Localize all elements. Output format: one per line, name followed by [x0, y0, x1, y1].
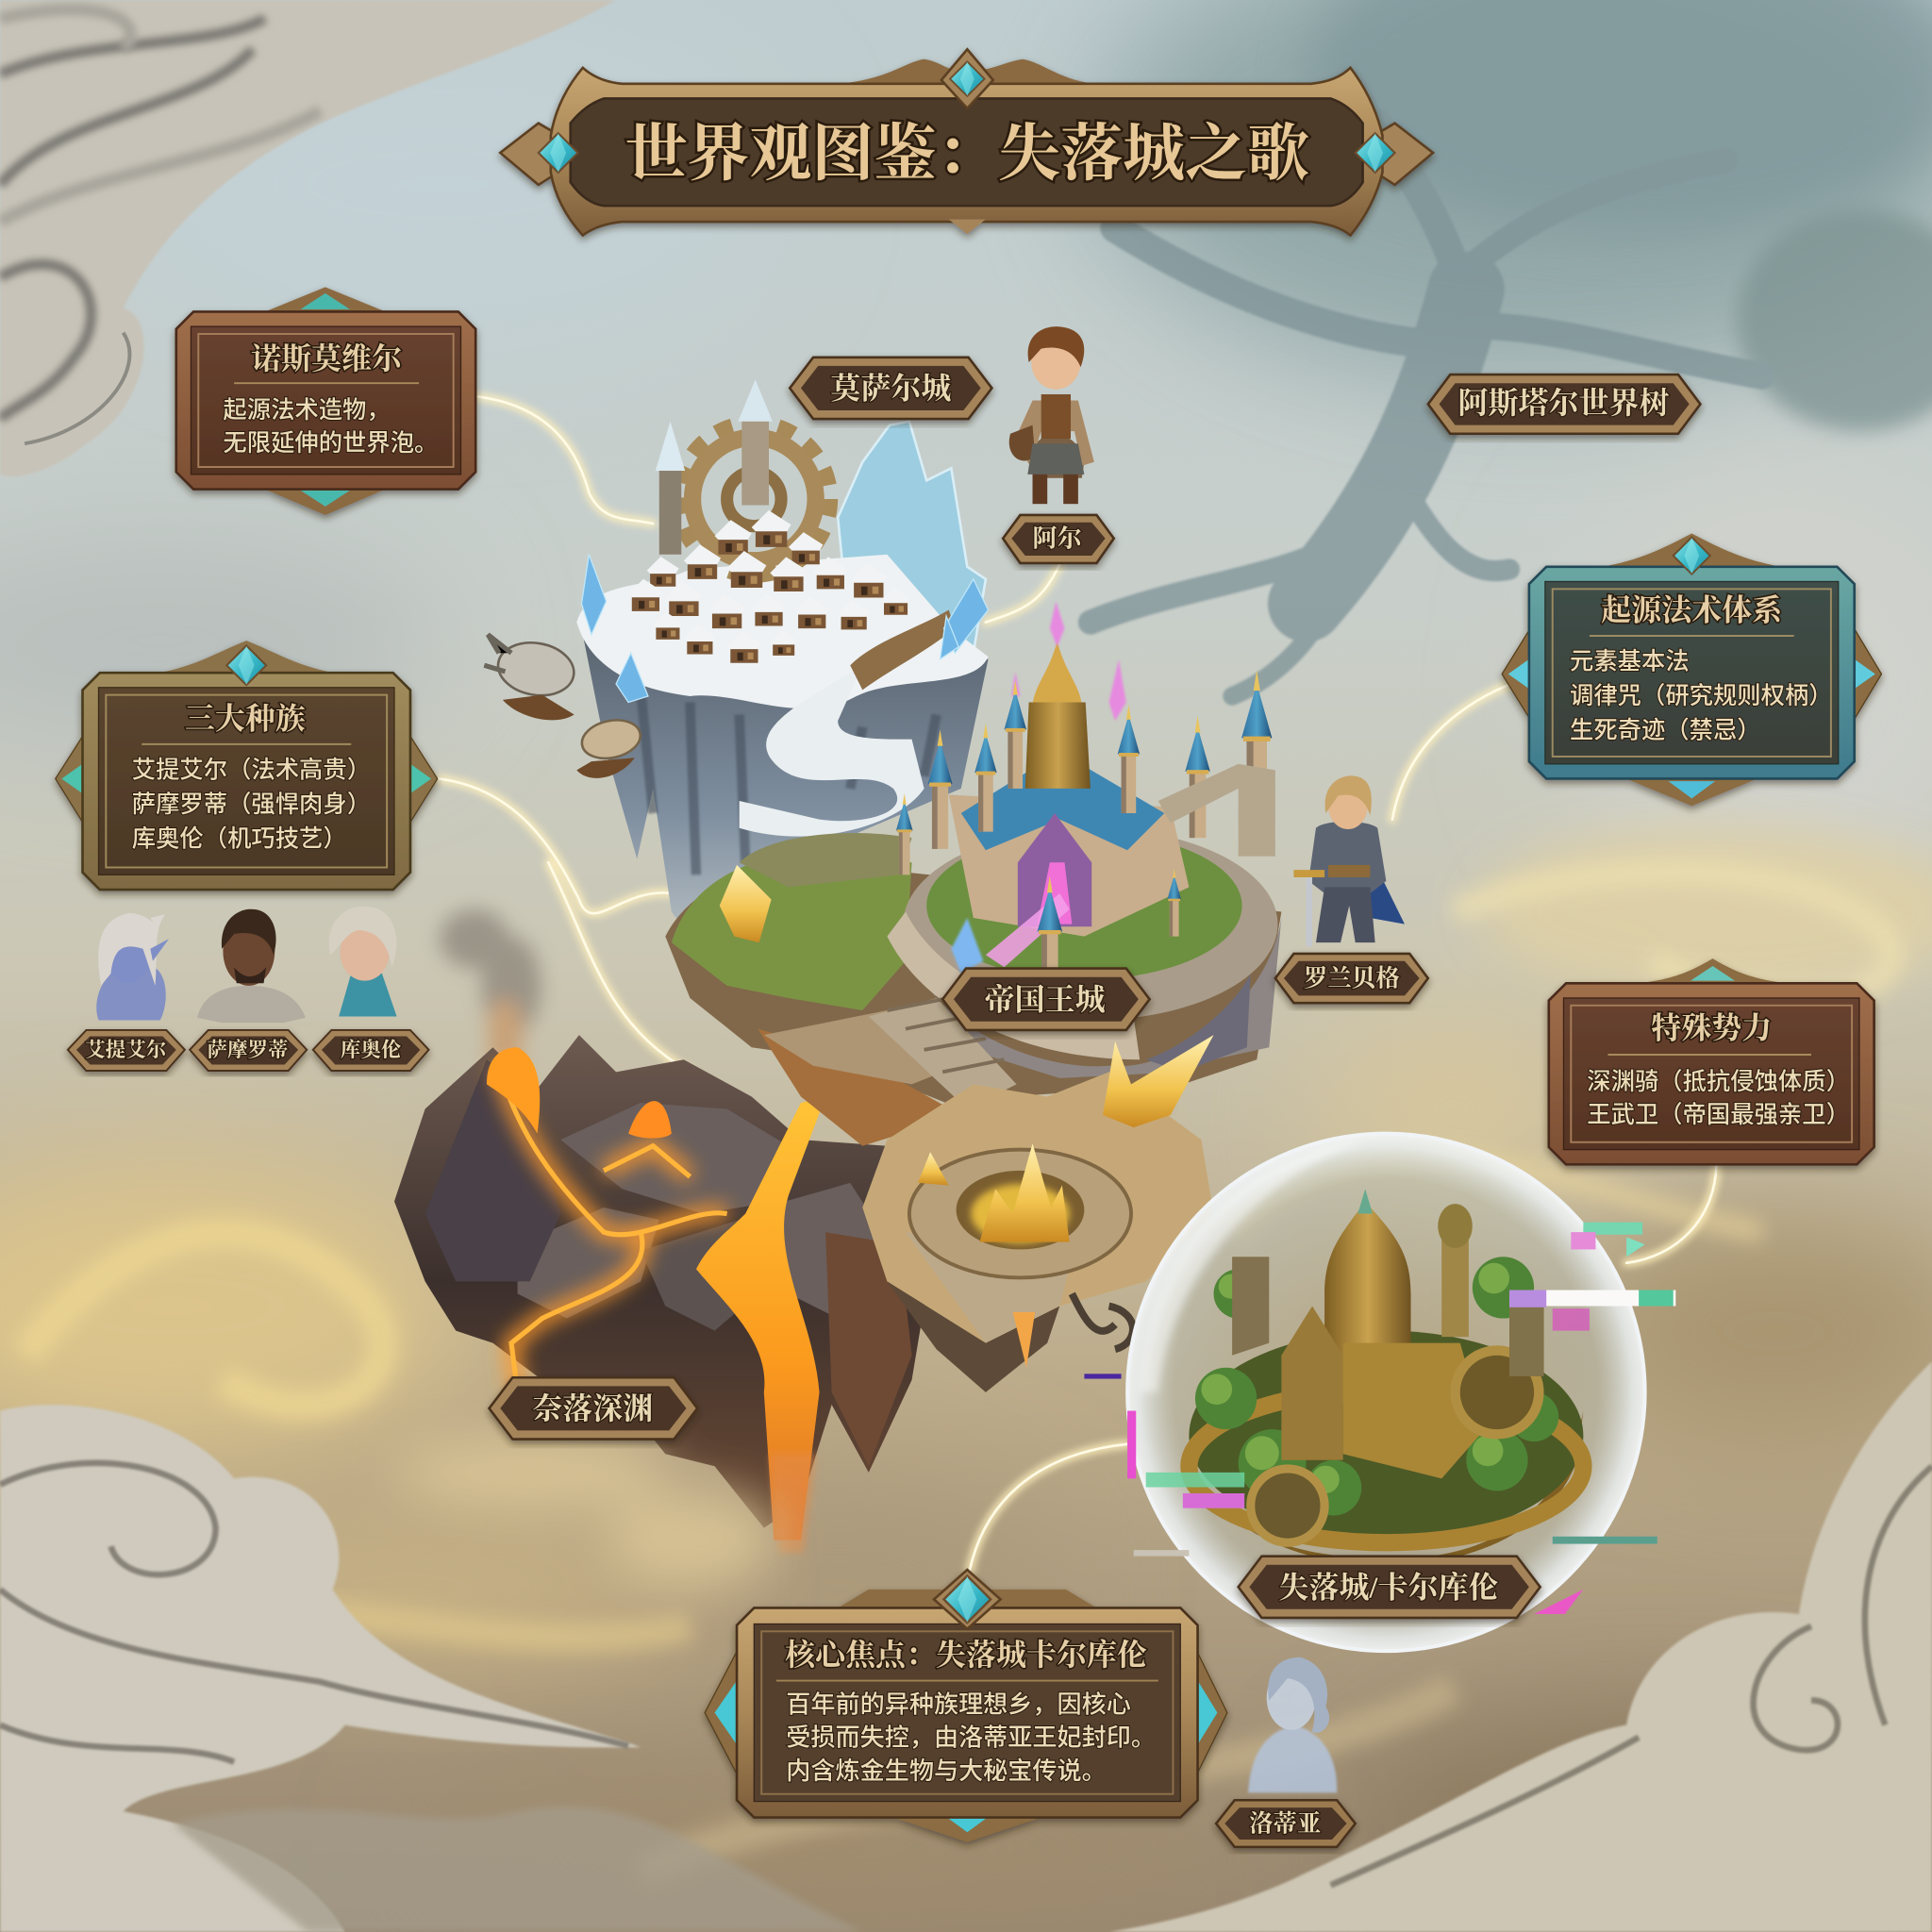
crater flame — [487, 1047, 540, 1134]
title banner — [500, 49, 1433, 235]
greatwall arches — [1146, 974, 1251, 1072]
divider — [234, 382, 419, 384]
volcano smoke — [440, 909, 541, 1072]
lava fall fade — [770, 1454, 816, 1553]
label: Samoroti — [190, 1030, 307, 1071]
castle core — [949, 794, 1189, 937]
right handle — [1345, 124, 1433, 185]
inner border — [198, 334, 454, 467]
central spire with golden dome — [1033, 641, 1082, 745]
divider — [1607, 1054, 1811, 1056]
body text: 起源法术造物， — [223, 397, 391, 424]
wood — [1545, 581, 1839, 764]
label: Aitiel: 艾提艾尔 — [85, 1039, 168, 1061]
character: Roland — [1293, 775, 1405, 946]
side wings — [1502, 612, 1881, 736]
ice peaks — [838, 422, 986, 653]
heading: 特殊势力 — [1651, 1010, 1772, 1044]
right gem — [1198, 1681, 1217, 1744]
label: Al — [1003, 515, 1114, 563]
frame — [1549, 983, 1874, 1164]
portrait: Kuolun engineer — [329, 907, 397, 1017]
frame — [1529, 567, 1855, 778]
divider — [776, 1680, 1158, 1682]
arch bridge — [1158, 764, 1275, 857]
lava veins — [499, 1066, 727, 1392]
right gem — [410, 764, 431, 793]
frame — [737, 1607, 1198, 1818]
inner border — [1571, 1006, 1852, 1142]
cliff — [581, 628, 989, 937]
top gem — [941, 49, 993, 108]
heading: 诺斯莫维尔 — [251, 341, 404, 375]
snow plateau — [576, 555, 989, 708]
panel: core focus — [705, 1570, 1227, 1842]
secondary vent — [628, 1101, 672, 1139]
body text: 元素基本法 — [1570, 648, 1690, 675]
body text: 百年前的异种族理想乡，因核心 — [786, 1690, 1131, 1718]
crest gem — [934, 1570, 1001, 1629]
ink cloud: bottom left — [0, 1405, 862, 1932]
volcano cone — [425, 1059, 560, 1281]
golden crystal cluster, upper right — [1103, 1035, 1214, 1127]
cliff shading — [641, 690, 937, 874]
title text: 世界观图鉴：失落城之歌 — [625, 120, 1309, 189]
label: Al: 阿尔 — [1033, 525, 1084, 552]
portrait: Aitiel elf — [96, 913, 169, 1020]
label: lost city — [1239, 1557, 1541, 1618]
hanging crystal — [1013, 1312, 1035, 1368]
ink cloud: bottom right — [1109, 1361, 1932, 1932]
bottom crest — [893, 1818, 1041, 1842]
crest gem — [1674, 537, 1710, 575]
low mist under lava island — [394, 1433, 776, 1590]
label: Mosar city — [790, 358, 991, 419]
airships — [484, 635, 644, 778]
wood — [98, 688, 394, 874]
label: Samoroti: 萨摩罗蒂 — [207, 1038, 289, 1061]
frame — [176, 311, 475, 490]
heading: 三大种族 — [185, 701, 306, 735]
wood — [1563, 998, 1859, 1150]
label: lost city: 失落城/卡尔库伦 — [1279, 1570, 1498, 1604]
body text: 生死奇迹（禁忌） — [1570, 718, 1761, 744]
panel: origin magic — [1502, 534, 1881, 806]
inner border — [761, 1631, 1173, 1794]
right gem — [1356, 133, 1395, 173]
crest gem — [226, 645, 266, 685]
stairs — [869, 998, 1017, 1109]
body text: 艾提艾尔（法术高贵） — [132, 757, 371, 783]
castle island: imperial capital — [665, 601, 1281, 1146]
label: Lotia: 洛蒂亚 — [1249, 1810, 1321, 1838]
top crest — [838, 1590, 1096, 1607]
underside — [758, 1029, 961, 1146]
golden crystal cluster, ring — [979, 1143, 1070, 1242]
label: imperial capital — [942, 969, 1150, 1030]
left gem — [1508, 659, 1529, 689]
top crest — [1602, 534, 1782, 567]
label: imperial capital: 帝国王城 — [985, 982, 1106, 1016]
label: Kuolun: 库奥伦 — [341, 1038, 401, 1061]
snow path — [740, 665, 924, 837]
body text: 王武卫（帝国最强亲卫） — [1587, 1102, 1850, 1128]
side wings — [705, 1633, 1227, 1792]
top crest — [160, 641, 333, 673]
label: Naraka abyss — [490, 1377, 697, 1440]
glitch artefacts — [1084, 1223, 1675, 1614]
ring plinth — [909, 1150, 1131, 1277]
bottom gem — [1668, 781, 1715, 798]
town houses — [628, 510, 910, 663]
top gem stone — [950, 61, 985, 96]
inner border — [106, 695, 387, 868]
left gem — [539, 133, 578, 173]
label: Roland — [1275, 954, 1428, 1003]
towers — [656, 379, 773, 555]
wood — [191, 326, 460, 475]
golden platform — [862, 1035, 1214, 1392]
blue crystal lamps — [951, 918, 983, 974]
snow island: Mosar city — [576, 379, 989, 937]
stone bridge ruins — [850, 610, 955, 690]
world tree silhouette — [1091, 0, 1932, 696]
bottom gem — [265, 490, 386, 515]
ink cloud: top left — [0, 0, 616, 476]
right gem — [1855, 659, 1875, 689]
lava glow — [499, 1066, 727, 1392]
front gear — [1251, 1469, 1324, 1542]
bottom point — [949, 219, 986, 234]
dome building — [1232, 1189, 1544, 1478]
greenery — [1195, 1257, 1558, 1516]
wood panel — [571, 98, 1363, 206]
bottom gem — [949, 1819, 986, 1832]
ice crystals — [581, 555, 989, 702]
rock mass — [394, 1035, 937, 1528]
label: Kuolun — [313, 1030, 429, 1071]
left handle — [500, 124, 589, 185]
panel: Nosmovir — [176, 287, 475, 515]
heading: 起源法术体系 — [1601, 593, 1783, 627]
body text: 萨摩罗蒂（强悍肉身） — [132, 791, 371, 818]
character: Al — [1009, 326, 1094, 504]
crest — [837, 59, 1095, 84]
blue spires — [896, 671, 1272, 998]
frame — [551, 68, 1382, 235]
label: Aitiel — [68, 1030, 185, 1071]
side wings — [56, 721, 438, 838]
label: Lotia — [1216, 1800, 1356, 1847]
rock base — [665, 862, 1281, 1109]
label: Roland: 罗兰贝格 — [1304, 965, 1400, 992]
pink spire flames — [1011, 601, 1126, 721]
clockwork gear — [677, 423, 830, 575]
panel: special factions — [1549, 958, 1874, 1164]
green meadow — [672, 850, 912, 1010]
left gem — [715, 1681, 737, 1744]
body text: 无限延伸的世界泡。 — [223, 430, 438, 457]
top gem — [265, 287, 386, 311]
panel: three races — [56, 641, 438, 890]
top crest — [1639, 958, 1787, 983]
label: Naraka abyss: 奈落深渊 — [532, 1391, 653, 1425]
glass highlight — [1140, 1140, 1368, 1392]
glitched bubble with lost city — [1084, 1134, 1675, 1651]
inner border — [1553, 589, 1831, 757]
city base ring — [1183, 1411, 1583, 1565]
body text: 受损而失控，由洛蒂亚王妃封印。 — [786, 1724, 1156, 1752]
heading: 核心焦点：失落城卡尔库伦 — [785, 1638, 1147, 1672]
golden shard — [720, 865, 772, 942]
divider — [142, 743, 351, 745]
hanging rock — [825, 1232, 912, 1466]
wood — [754, 1624, 1180, 1802]
portrait: Samoroti warrior — [197, 909, 306, 1023]
body text: 深渊骑（抵抗侵蚀体质） — [1587, 1069, 1850, 1095]
grey rock terraces — [518, 1103, 906, 1331]
divider — [1590, 635, 1794, 637]
ring wall — [903, 828, 1277, 1020]
body text: 调律咒（研究规则权柄） — [1570, 683, 1833, 709]
label: Mosar city: 莫萨尔城 — [830, 371, 951, 405]
lava island: Naraka abyss — [394, 1035, 937, 1553]
body text: 内含炼金生物与大秘宝传说。 — [786, 1757, 1107, 1785]
crest gem stone — [943, 1576, 991, 1623]
crest gem — [1690, 966, 1735, 981]
lava waterfall — [696, 1096, 825, 1541]
character: Lotia ghost — [1248, 1657, 1337, 1792]
pipes — [1072, 1293, 1133, 1349]
label: world tree Astar — [1428, 375, 1700, 434]
left gem — [61, 764, 83, 793]
frame — [83, 673, 410, 890]
bottom crest — [1626, 778, 1757, 806]
body text: 库奥伦（机巧技艺） — [132, 825, 347, 852]
glowing connector lines — [439, 397, 1716, 1583]
small golden crystal — [918, 1152, 949, 1185]
label: world tree Astar: 阿斯塔尔世界树 — [1457, 386, 1669, 420]
glass sphere — [1127, 1134, 1645, 1651]
